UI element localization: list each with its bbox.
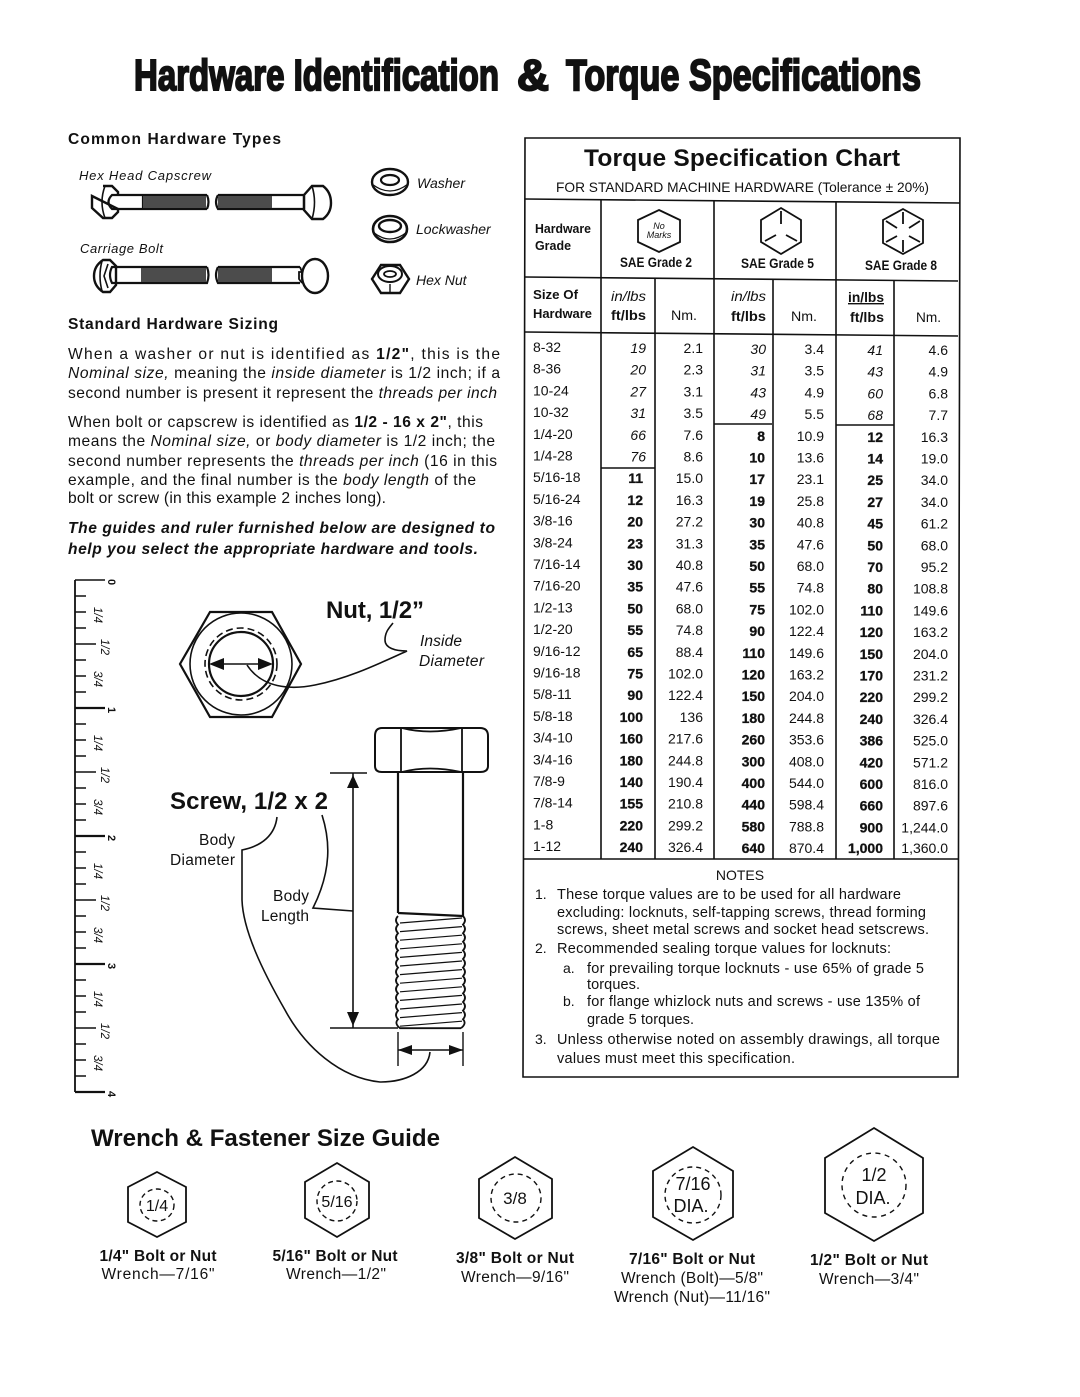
column header: size of hardware: Size Of: [533, 287, 579, 302]
text block: nominal size of washer or nut: second number is present it represent the threads per inch: [68, 385, 497, 402]
body length label: Length: [261, 908, 309, 925]
torque table rows: 10-24: [533, 382, 569, 398]
icon: washer: Washer: [417, 175, 466, 191]
torque table rows: 108.8: [913, 581, 948, 597]
body length label: [261, 888, 309, 925]
icon: carriage bolt: Carriage Bolt: [80, 241, 164, 256]
heading: common hardware types: Common Hardware Types: [68, 131, 281, 148]
torque table rows: 220: [860, 689, 883, 705]
torque table rows: 136: [680, 709, 703, 725]
torque table rows: 7.7: [929, 407, 948, 423]
torque table rows: 74.8: [797, 580, 824, 596]
chart subtitle: FOR STANDARD MACHINE HARDWARE (Tolerance ± 20%): [556, 179, 929, 195]
torque table rows: 27.2: [676, 514, 703, 530]
torque table rows: 149.6: [789, 645, 824, 661]
notes: a.: [563, 960, 575, 976]
torque table rows: 204.0: [913, 646, 948, 662]
torque table rows: 35: [749, 536, 765, 552]
torque table rows: 20: [629, 362, 646, 378]
torque table rows: [533, 339, 948, 856]
notes: excluding: locknuts, self-tapping screws, thread forming: [557, 905, 926, 921]
torque table rows: 49: [750, 406, 766, 422]
torque table rows: 17: [749, 471, 765, 487]
screw label: Screw, 1/2 x 2: [170, 788, 328, 815]
torque table rows: 61.2: [921, 516, 948, 532]
guide: 5/16 bolt or nut: 5/16" Bolt or Nut: [272, 1248, 398, 1265]
guide: 1/2 bolt or nut: [810, 1128, 928, 1288]
torque table rows: 122.4: [668, 687, 703, 703]
torque table rows: 5.5: [805, 406, 824, 422]
notes: b.: [563, 993, 575, 1009]
ruler: [75, 579, 117, 1098]
column headers: grade 2 units: ft/lbs: [611, 307, 646, 323]
torque table rows: 816.0: [913, 776, 948, 792]
notes: 3.: [535, 1031, 547, 1047]
guide: 1/4 bolt or nut: Wrench—7/16": [102, 1266, 214, 1283]
body diameter label: [170, 832, 235, 869]
torque table rows: 1-12: [533, 838, 561, 854]
notes: Recommended sealing torque values for locknuts:: [557, 941, 891, 957]
nut diagram: [180, 612, 407, 717]
ruler: 1/4: [91, 735, 103, 751]
torque table rows: 60: [867, 385, 883, 401]
torque table rows: 100: [620, 709, 643, 725]
guide: 1/4 bolt or nut: [100, 1172, 216, 1283]
torque table rows: 95.2: [921, 559, 948, 575]
torque table rows: 31: [630, 405, 646, 421]
notes: grade 5 torques.: [587, 1012, 694, 1028]
body diameter label: Diameter: [170, 852, 235, 869]
icon: SAE grade 8: [865, 209, 937, 273]
torque table rows: 580: [742, 818, 765, 834]
torque table rows: 80: [867, 581, 883, 597]
hardware grade label: Grade: [535, 238, 571, 253]
guide: 7/16 bolt or nut: 7/16: [675, 1174, 711, 1194]
torque table rows: 102.0: [789, 601, 824, 617]
torque table rows: 14: [867, 450, 883, 466]
title: Hardware Identification: [134, 51, 499, 100]
icon: washer: [372, 169, 466, 195]
notes: for prevailing torque locknuts - use 65% of grade 5: [587, 961, 924, 977]
torque table rows: 3/8-24: [533, 534, 573, 550]
column header: size of hardware: Hardware: [533, 306, 592, 321]
torque table rows: 19.0: [921, 450, 948, 466]
torque table rows: 110: [742, 645, 765, 661]
torque table rows: 400: [742, 775, 765, 791]
icon: lockwasher: [373, 216, 492, 242]
torque table rows: 4.9: [929, 364, 948, 380]
notes: for flange whizlock nuts and screws - use 135% of: [587, 994, 921, 1010]
torque table rows: 571.2: [913, 754, 948, 770]
notes: torques.: [587, 977, 640, 993]
torque table rows: 180: [742, 710, 765, 726]
ruler: 1/2: [98, 895, 110, 912]
torque table rows: 8: [757, 428, 765, 444]
torque table rows: 50: [867, 537, 883, 553]
torque table rows: 30: [749, 515, 765, 531]
ruler: 1/2: [98, 767, 110, 784]
chart title: Torque Specification Chart: [584, 145, 900, 172]
torque table rows: 75: [749, 601, 765, 617]
torque table rows: 3/4-16: [533, 751, 573, 767]
hardware grade label: Hardware: [535, 221, 591, 236]
heading: wrench and fastener size guide: Wrench & Fastener Size Guide: [91, 1125, 440, 1152]
torque table rows: 13.6: [797, 450, 824, 466]
torque table rows: 210.8: [668, 796, 703, 812]
title: &: [517, 51, 549, 100]
torque table rows: 220: [620, 817, 643, 833]
nut label: Nut, 1/2”: [326, 597, 424, 624]
torque table rows: 260: [742, 732, 765, 748]
column headers: grade 5 units: Nm.: [791, 308, 817, 324]
torque table rows: 66: [630, 427, 646, 443]
torque table rows: 9/16-18: [533, 664, 581, 680]
torque table rows: 3.4: [805, 341, 824, 357]
torque table rows: 55: [627, 622, 643, 638]
guide: 7/16 bolt or nut: Wrench (Bolt)—5/8": [621, 1270, 763, 1287]
torque table rows: 68.0: [797, 558, 824, 574]
torque table rows: 12: [867, 429, 883, 445]
torque table rows: 326.4: [668, 839, 703, 855]
torque table rows: 150: [742, 688, 765, 704]
torque table rows: 15.0: [676, 470, 703, 486]
torque table rows: 231.2: [913, 668, 948, 684]
text block: nominal size of washer or nut: [68, 346, 500, 402]
torque table rows: 7.6: [684, 427, 703, 443]
inside diameter label: [419, 633, 485, 670]
torque table rows: 34.0: [921, 494, 948, 510]
guide: 1/4 bolt or nut: 1/4: [146, 1198, 168, 1215]
column headers: grade 2 units: [611, 288, 697, 323]
column headers: grade 2 units: in/lbs: [611, 288, 646, 304]
torque table rows: 102.0: [668, 666, 703, 682]
torque table rows: 244.8: [789, 710, 824, 726]
torque table rows: 34.0: [921, 472, 948, 488]
torque table rows: 3/4-10: [533, 730, 573, 746]
column headers: grade 8 units: [848, 289, 941, 325]
torque table rows: 19: [630, 340, 646, 356]
guide: 7/16 bolt or nut: Wrench (Nut)—11/16": [614, 1289, 770, 1306]
icon: lockwasher: Lockwasher: [416, 221, 492, 237]
torque table rows: 149.6: [913, 602, 948, 618]
torque table rows: 4.6: [929, 342, 948, 358]
torque table rows: 41: [867, 342, 883, 358]
icon: carriage bolt: [80, 241, 328, 293]
torque table rows: 544.0: [789, 775, 824, 791]
column headers: grade 5 units: ft/lbs: [731, 308, 766, 324]
torque table rows: 65: [627, 644, 643, 660]
guide: 5/16 bolt or nut: Wrench—1/2": [286, 1266, 386, 1283]
notes: Unless otherwise noted on assembly drawings, all torque: [557, 1032, 940, 1048]
torque table rows: 10-32: [533, 404, 569, 420]
torque table rows: 40.8: [797, 515, 824, 531]
torque table rows: 25.8: [797, 493, 824, 509]
torque table rows: 55: [749, 580, 765, 596]
guide: 3/8 bolt or nut: 3/8: [503, 1189, 527, 1208]
torque table rows: 12: [627, 492, 643, 508]
torque table rows: 47.6: [797, 536, 824, 552]
torque table rows: 25: [867, 472, 883, 488]
column headers: grade 2 units: Nm.: [671, 307, 697, 323]
torque table rows: 23.1: [797, 471, 824, 487]
torque table rows: 140: [620, 774, 643, 790]
text block: bolt or capscrew size: second number represents the threads per inch (16 in this: [68, 453, 497, 470]
body diameter label: Body: [199, 832, 235, 849]
torque table rows: 300: [742, 753, 765, 769]
text block: nominal size of washer or nut: Nominal size, meaning the inside diameter is 1/2 inch; if a: [68, 365, 500, 382]
torque table rows: 190.4: [668, 774, 703, 790]
ruler: 1/2: [98, 1023, 110, 1040]
torque table rows: 3.1: [684, 383, 703, 399]
notes: These torque values are to be used for all hardware: [557, 887, 901, 903]
ruler: 0: [105, 579, 117, 585]
torque table rows: 1/2-13: [533, 599, 573, 615]
guide: 1/2 bolt or nut: DIA.: [855, 1188, 891, 1208]
torque table rows: 4.9: [805, 384, 824, 400]
torque table rows: 900: [860, 819, 883, 835]
ruler: 1/4: [91, 863, 103, 879]
torque table rows: 16.3: [676, 492, 703, 508]
torque table rows: 120: [860, 624, 883, 640]
guide: 7/16 bolt or nut: DIA.: [673, 1196, 709, 1216]
column headers: grade 5 units: [731, 288, 817, 324]
panel: torque specification chart: [523, 138, 960, 1077]
torque table rows: 244.8: [668, 752, 703, 768]
ruler: 1/4: [91, 607, 103, 623]
text block: bolt or capscrew size: means the Nominal size, or body diameter is 1/2 inch; the: [68, 433, 495, 450]
column header: size of hardware: [533, 287, 592, 321]
torque table rows: 2.3: [684, 362, 703, 378]
torque table rows: 10: [749, 450, 765, 466]
torque table rows: 8-32: [533, 339, 561, 355]
guide: 1/4 bolt or nut: 1/4" Bolt or Nut: [100, 1248, 216, 1265]
torque table rows: 299.2: [668, 817, 703, 833]
text block: guides and ruler note: help you select the appropriate hardware and tools.: [68, 541, 478, 558]
torque table rows: 122.4: [789, 623, 824, 639]
notes: NOTES: [716, 867, 764, 883]
ruler: 3/4: [91, 671, 103, 687]
text block: guides and ruler note: The guides and ruler furnished below are designed to: [68, 520, 495, 537]
torque table rows: 386: [860, 733, 883, 749]
body length label: Body: [273, 888, 309, 905]
torque table rows: 47.6: [676, 579, 703, 595]
guide: 1/2 bolt or nut: 1/2" Bolt or Nut: [810, 1252, 928, 1269]
text block: nominal size of washer or nut: When a washer or nut is identified as 1/2", this is the: [68, 346, 500, 363]
ruler: 1/2: [98, 639, 110, 656]
text block: bolt or capscrew size: [68, 414, 497, 507]
torque table rows: 74.8: [676, 622, 703, 638]
notes: [535, 867, 940, 1067]
ruler: 3/4: [91, 799, 103, 815]
ruler: 3/4: [91, 927, 103, 943]
ruler: 1/4: [91, 991, 103, 1007]
torque table rows: 160: [620, 731, 643, 747]
torque table rows: 163.2: [913, 624, 948, 640]
guide: 5/16 bolt or nut: 5/16: [321, 1194, 353, 1211]
guide: 5/16 bolt or nut: [272, 1163, 398, 1283]
torque table rows: 420: [860, 754, 883, 770]
torque table rows: 180: [620, 752, 643, 768]
guide: 1/2 bolt or nut: 1/2: [861, 1165, 887, 1185]
column headers: grade 8 units: Nm.: [916, 309, 941, 325]
torque table rows: 43: [750, 384, 766, 400]
torque table rows: 440: [742, 797, 765, 813]
icon: hex nut: [372, 265, 468, 293]
ruler: 2: [105, 835, 117, 841]
torque table rows: 1/2-20: [533, 621, 573, 637]
torque table rows: 8.6: [684, 448, 703, 464]
torque table rows: 40.8: [676, 557, 703, 573]
title: Torque Specifications: [566, 51, 921, 100]
torque table rows: 27: [867, 494, 883, 510]
torque table rows: 68.0: [921, 537, 948, 553]
screw diagram: [242, 728, 488, 1082]
torque table rows: 50: [627, 600, 643, 616]
torque table rows: 217.6: [668, 731, 703, 747]
inside diameter label: Diameter: [419, 653, 485, 670]
heading: standard hardware sizing: Standard Hardware Sizing: [68, 316, 278, 333]
torque table rows: 88.4: [676, 644, 703, 660]
torque table rows: 155: [620, 796, 643, 812]
torque table rows: 299.2: [913, 689, 948, 705]
torque table rows: 7/16-14: [533, 556, 581, 572]
icon: SAE grade 5: [741, 208, 814, 271]
text block: bolt or capscrew size: When bolt or capscrew is identified as 1/2 - 16 x 2", this: [68, 414, 483, 431]
torque table rows: 30: [750, 341, 766, 357]
torque table rows: 1-8: [533, 816, 553, 832]
torque table rows: 870.4: [789, 840, 824, 856]
torque table rows: 20: [627, 514, 643, 530]
guide: 7/16 bolt or nut: [614, 1147, 770, 1306]
torque table rows: 43: [867, 364, 883, 380]
icon: SAE grade 5: SAE Grade 5: [741, 256, 814, 271]
torque table rows: 35: [627, 579, 643, 595]
hardware grade label: [535, 221, 591, 253]
torque table rows: 5/8-18: [533, 708, 573, 724]
torque table rows: 353.6: [789, 732, 824, 748]
torque table rows: 120: [742, 666, 765, 682]
torque table rows: 598.4: [789, 797, 824, 813]
icon: hex head capscrew: [79, 168, 331, 219]
torque table rows: 3.5: [684, 405, 703, 421]
torque table rows: 660: [860, 798, 883, 814]
torque table rows: 788.8: [789, 818, 824, 834]
icon: hex head capscrew: Hex Head Capscrew: [79, 168, 213, 183]
torque table rows: 150: [860, 646, 883, 662]
torque table rows: 240: [860, 711, 883, 727]
icon: SAE grade 2: [620, 210, 692, 270]
ruler: 3/4: [91, 1055, 103, 1071]
ruler: 3: [105, 963, 117, 969]
ruler: 4: [105, 1091, 117, 1098]
torque table rows: 70: [867, 559, 883, 575]
torque table rows: 11: [628, 470, 643, 486]
torque table rows: 75: [627, 666, 643, 682]
title: [134, 51, 921, 100]
guide: 3/8 bolt or nut: Wrench—9/16": [461, 1269, 569, 1286]
text block: bolt or capscrew size: example, and the final number is the body length of the: [68, 472, 476, 489]
torque table rows: 68.0: [676, 600, 703, 616]
guide: 1/2 bolt or nut: Wrench—3/4": [819, 1271, 919, 1288]
torque table rows: 8-36: [533, 361, 561, 377]
torque table rows: 1/4-28: [533, 448, 573, 464]
torque table rows: 16.3: [921, 429, 948, 445]
guide: 7/16 bolt or nut: 7/16" Bolt or Nut: [629, 1251, 755, 1268]
torque table rows: 6.8: [929, 385, 948, 401]
notes: 2.: [535, 940, 547, 956]
torque table rows: 50: [749, 558, 765, 574]
torque table rows: 31: [750, 363, 766, 379]
guide: 3/8 bolt or nut: 3/8" Bolt or Nut: [456, 1250, 574, 1267]
torque table rows: 5/16-18: [533, 469, 581, 485]
torque table rows: 90: [749, 623, 765, 639]
torque table rows: 897.6: [913, 798, 948, 814]
text block: guides and ruler note: [68, 520, 495, 558]
torque table rows: 68: [867, 407, 883, 423]
torque table rows: 3/8-16: [533, 513, 573, 529]
torque table rows: 5/8-11: [533, 686, 572, 702]
torque table rows: 1,360.0: [901, 840, 948, 856]
icon: SAE grade 2: Marks: [647, 230, 672, 240]
torque table rows: 1/4-20: [533, 426, 573, 442]
torque table rows: 31.3: [676, 535, 703, 551]
torque table rows: 10.9: [797, 428, 824, 444]
torque table rows: 5/16-24: [533, 491, 581, 507]
torque table rows: 30: [627, 557, 643, 573]
torque table rows: 640: [742, 840, 765, 856]
torque table rows: 76: [630, 448, 646, 464]
notes: 1.: [535, 886, 547, 902]
torque table rows: 240: [620, 839, 643, 855]
torque table rows: 204.0: [789, 688, 824, 704]
icon: SAE grade 8: SAE Grade 8: [865, 258, 937, 273]
torque table rows: 326.4: [913, 711, 948, 727]
torque table rows: 7/16-20: [533, 578, 581, 594]
torque table rows: 90: [627, 687, 643, 703]
torque table rows: 2.1: [684, 340, 703, 356]
column headers: grade 8 units: in/lbs: [848, 289, 884, 305]
torque table rows: 9/16-12: [533, 643, 581, 659]
icon: SAE grade 2: No: [653, 221, 665, 231]
ruler: 1: [105, 707, 117, 713]
torque table rows: 7/8-9: [533, 773, 565, 789]
text block: bolt or capscrew size: bolt or screw (in this example 2 inches long).: [68, 490, 386, 507]
torque table rows: 525.0: [913, 733, 948, 749]
torque table rows: 27: [629, 383, 647, 399]
torque table rows: 600: [860, 776, 883, 792]
notes: screws, sheet metal screws and socket head setscrews.: [557, 922, 929, 938]
torque table rows: 23: [627, 535, 643, 551]
column headers: grade 8 units: ft/lbs: [850, 309, 884, 325]
torque table rows: 7/8-14: [533, 795, 573, 811]
torque table rows: 19: [749, 493, 765, 509]
torque table rows: 163.2: [789, 666, 824, 682]
torque table rows: 408.0: [789, 753, 824, 769]
torque table rows: 170: [860, 668, 883, 684]
notes: values must meet this specification.: [557, 1051, 795, 1067]
torque table rows: 1,000: [848, 840, 883, 856]
column headers: grade 5 units: in/lbs: [731, 288, 766, 304]
inside diameter label: Inside: [420, 633, 462, 650]
torque table rows: 45: [867, 516, 883, 532]
icon: SAE grade 2: SAE Grade 2: [620, 255, 692, 270]
torque table rows: 3.5: [805, 363, 824, 379]
torque table rows: 110: [860, 602, 883, 618]
guide: 3/8 bolt or nut: [456, 1157, 574, 1286]
icon: hex nut: Hex Nut: [416, 272, 468, 288]
torque table rows: 1,244.0: [901, 819, 948, 835]
